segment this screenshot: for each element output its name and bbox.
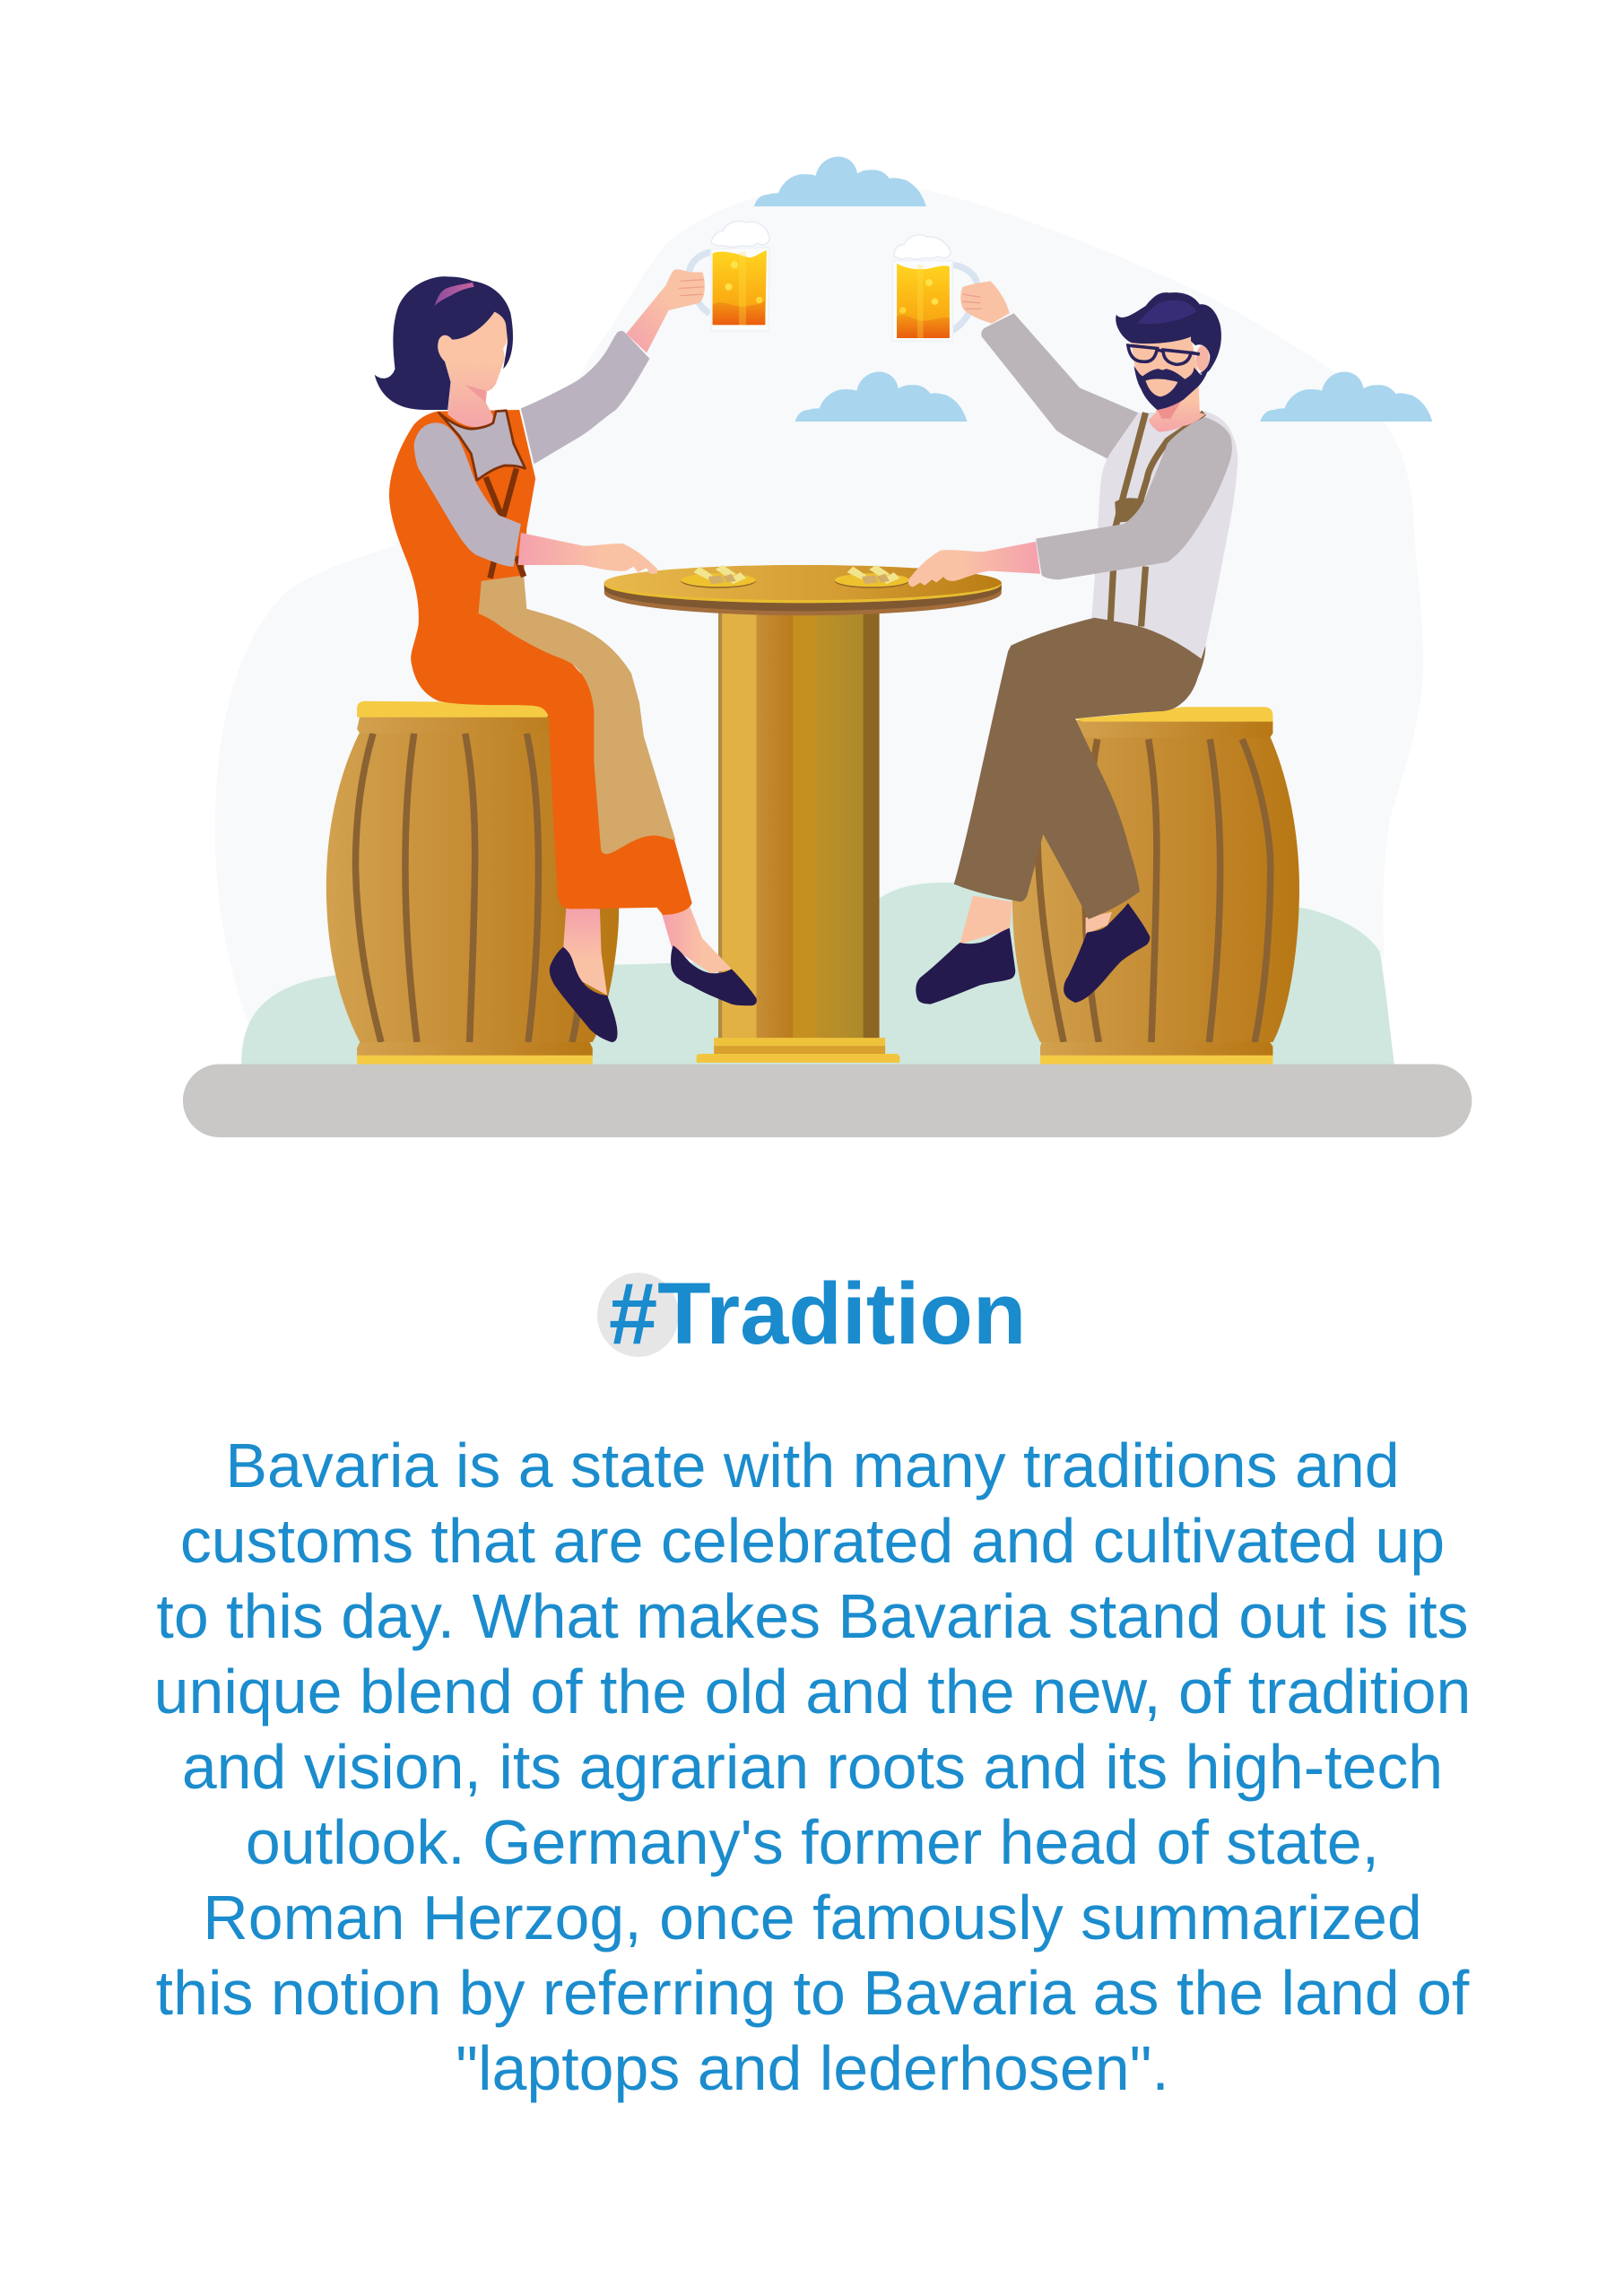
body text: this notion by referring to Bavaria as the land of [156,1958,1469,2028]
woman: raised forearm and hand [626,269,705,352]
woman: beer mug [689,222,769,331]
man: shirt [1091,412,1238,660]
table top with plates [604,565,1002,615]
woman: apron [479,575,675,854]
body text: and vision, its agrarian roots and its high-tech [182,1732,1443,1802]
man: resting arm and hand [908,542,1040,587]
man: glasses [1128,345,1200,364]
barrel right [1012,707,1299,1064]
woman: headband [435,283,474,306]
man: neck [1149,373,1205,431]
man: beard and moustache [1133,366,1209,410]
woman: shoes [550,947,618,1042]
body text: "laptops and lederhosen". [456,2033,1169,2103]
woman [375,222,769,1042]
man: trousers [954,618,1205,919]
body text [154,1431,1471,2103]
staves right [1038,739,1271,1042]
woman: legs [563,908,607,996]
plate left with snacks [681,565,756,588]
man: ear [1196,345,1209,372]
man: shoes [916,928,1015,1004]
body text: to this day. What makes Bavaria stand out is its [156,1581,1469,1651]
woman: resting arm and hand [518,533,657,574]
plate right with snacks [835,565,909,588]
man: front sleeve [1036,417,1232,579]
man: raised sleeve [981,313,1138,459]
woman: hair [375,276,513,410]
woman: front sleeve [414,422,521,567]
cloud right [1260,372,1432,422]
cloud middle [795,372,967,422]
staves left [355,734,586,1042]
background blob [215,183,1423,1024]
body text: Bavaria is a state with many traditions and [225,1431,1400,1500]
body text: customs that are celebrated and cultivated up [180,1506,1445,1576]
man [892,235,1238,1004]
body text: Roman Herzog, once famously summarized [203,1883,1422,1952]
body text: outlook. Germany's former head of state, [246,1807,1379,1877]
title: #Tradition [609,1265,1026,1362]
woman: dress straps [486,468,524,578]
man: suspenders [1110,413,1204,627]
ground bar [183,1064,1472,1137]
woman: raised sleeve [521,331,649,464]
cloud top [754,157,926,206]
man: raised hand [960,281,1010,324]
body text: unique blend of the old and the new, of tradition [154,1657,1471,1726]
table column [697,607,899,1063]
hashtag badge circle [597,1273,679,1357]
man: beer mug [892,235,977,341]
barrel left [326,701,619,1064]
woman: blouse collar [439,411,525,480]
woman: neck and face [438,312,508,427]
man: ankles [960,896,1012,944]
man: face [1131,336,1200,410]
green hills [241,883,1394,1064]
woman: dress [389,410,692,915]
man: suspender chest strap [1115,498,1145,523]
man: hair [1116,292,1221,374]
